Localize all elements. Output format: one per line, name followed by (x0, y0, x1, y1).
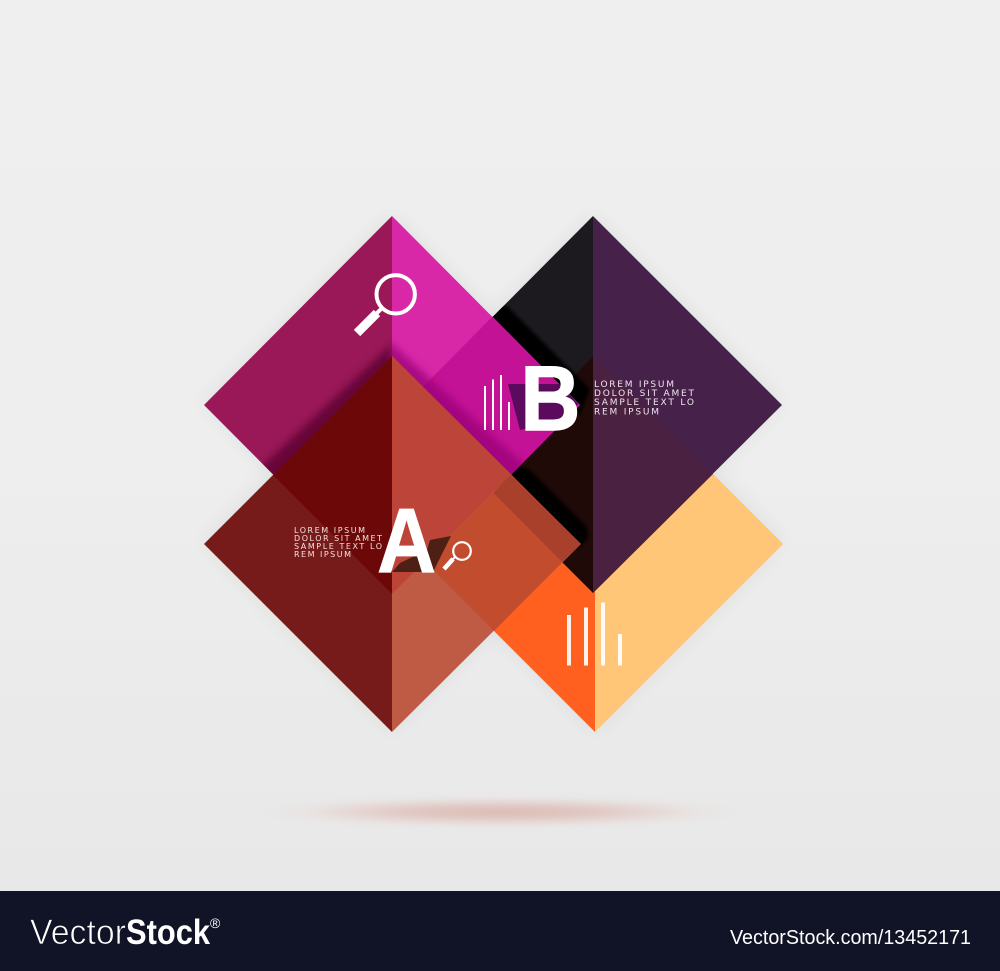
text block A: REM IPSUM (294, 550, 351, 559)
bars icon near B (484, 375, 510, 430)
infographic: overlapping diamonds (0, 216, 1000, 971)
footer logo: ® (210, 915, 221, 931)
bars icon on orange (567, 602, 622, 666)
footer logo: Stock (126, 913, 210, 952)
diamond: magenta top left (204, 216, 580, 475)
letter B: B (520, 347, 580, 450)
letter A shadow (392, 536, 451, 572)
text block A: SAMPLE TEXT LO (294, 542, 382, 551)
diamond: orange bottom right (407, 356, 783, 732)
text block A (294, 526, 382, 559)
icon: small magnifier (444, 542, 471, 569)
text block B: REM IPSUM (594, 407, 659, 417)
text block B: SAMPLE TEXT LO (594, 398, 694, 408)
letter A: A (377, 490, 436, 592)
footer url: VectorStock.com/13452171 (730, 927, 971, 949)
soft shadow behind diamonds (204, 214, 783, 730)
floor shadow (240, 795, 760, 829)
text block B: DOLOR SIT AMET (594, 389, 694, 399)
text block B: LOREM IPSUM (594, 380, 674, 390)
text block A: DOLOR SIT AMET (294, 534, 382, 543)
icon: large magnifier (357, 275, 415, 333)
footer bar (0, 891, 1000, 971)
diamond: purple top right (492, 216, 782, 593)
letter B shadow (508, 384, 578, 430)
diamond: red bottom left (204, 356, 581, 732)
text block B (594, 380, 694, 417)
footer logo (30, 913, 221, 952)
text block A: LOREM IPSUM (294, 526, 365, 535)
footer logo: Vector (30, 913, 126, 952)
